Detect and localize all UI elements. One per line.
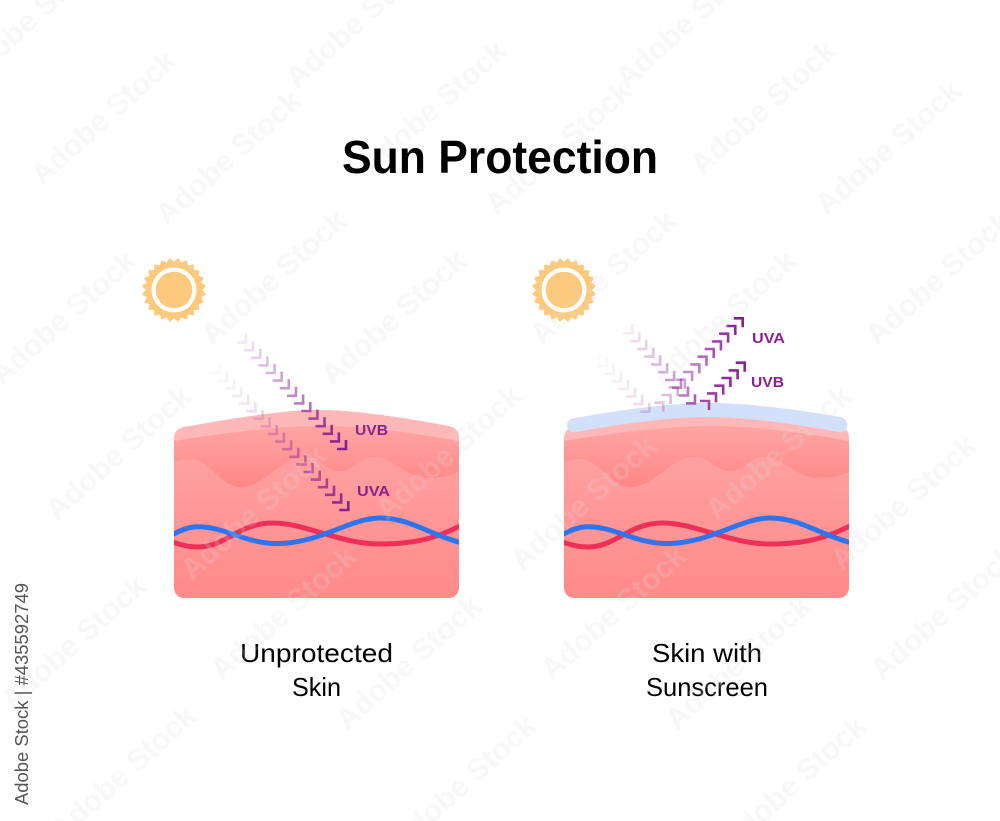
stock watermark pattern: Adobe Stock bbox=[504, 429, 663, 577]
stock watermark pattern: Adobe Stock bbox=[174, 439, 333, 587]
stock watermark pattern: Adobe Stock bbox=[534, 539, 693, 687]
panel: unprotected skin bbox=[143, 259, 462, 702]
skin cross-section bbox=[170, 405, 462, 600]
stock watermark pattern: Adobe Stock bbox=[809, 74, 968, 222]
stock watermark pattern: Adobe Stock bbox=[314, 244, 473, 392]
label: UVA: UVA bbox=[752, 330, 785, 347]
title: Sun Protection bbox=[342, 131, 658, 183]
stock watermark pattern: Adobe Stock bbox=[194, 204, 353, 352]
sunscreen film bbox=[567, 403, 847, 432]
arrow: UVB penetrating bbox=[237, 334, 346, 449]
stock id text: Adobe Stock | #435592749 bbox=[12, 583, 32, 805]
panel: skin with sunscreen bbox=[533, 259, 852, 702]
arrow: UVA reflected bbox=[654, 318, 743, 412]
arrow: UVB reflected bbox=[700, 363, 745, 410]
caption: unprotected skin: Unprotected bbox=[240, 638, 393, 668]
stock watermark pattern: Adobe Stock bbox=[329, 589, 488, 737]
stock watermark pattern: Adobe Stock bbox=[524, 204, 683, 352]
stock watermark pattern: Adobe Stock bbox=[479, 74, 638, 222]
stock watermark pattern: Adobe Stock bbox=[644, 244, 803, 392]
caption: skin with sunscreen: Skin with bbox=[652, 638, 762, 668]
stock watermark pattern: Adobe Stock bbox=[204, 539, 363, 687]
label: UVB: UVB bbox=[355, 422, 388, 439]
skin cross-section bbox=[560, 405, 852, 600]
stock watermark pattern: Adobe Stock bbox=[659, 589, 818, 737]
arrow: UVA penetrating bbox=[211, 364, 348, 510]
arrow: UVB incoming bbox=[590, 350, 649, 412]
stock watermark pattern: Adobe Stock bbox=[699, 379, 858, 527]
caption: unprotected skin: Skin bbox=[292, 672, 341, 702]
stock watermark pattern: Adobe Stock bbox=[24, 44, 183, 192]
label: UVB: UVB bbox=[751, 374, 784, 391]
label: UVA: UVA bbox=[357, 483, 390, 500]
arrow: UVA incoming bbox=[623, 324, 695, 403]
stock watermark pattern: Adobe Stock bbox=[354, 34, 513, 182]
stock watermark pattern: Adobe Stock bbox=[39, 379, 198, 527]
icon: sun bbox=[533, 259, 595, 321]
stock watermark pattern: Adobe Stock bbox=[369, 379, 528, 527]
stock watermark pattern: Adobe Stock bbox=[824, 429, 983, 577]
caption: skin with sunscreen: Sunscreen bbox=[646, 672, 768, 702]
icon: sun bbox=[143, 259, 205, 321]
stock watermark pattern: Adobe Stock bbox=[684, 34, 843, 182]
stock watermark pattern: Adobe Stock bbox=[149, 84, 308, 232]
